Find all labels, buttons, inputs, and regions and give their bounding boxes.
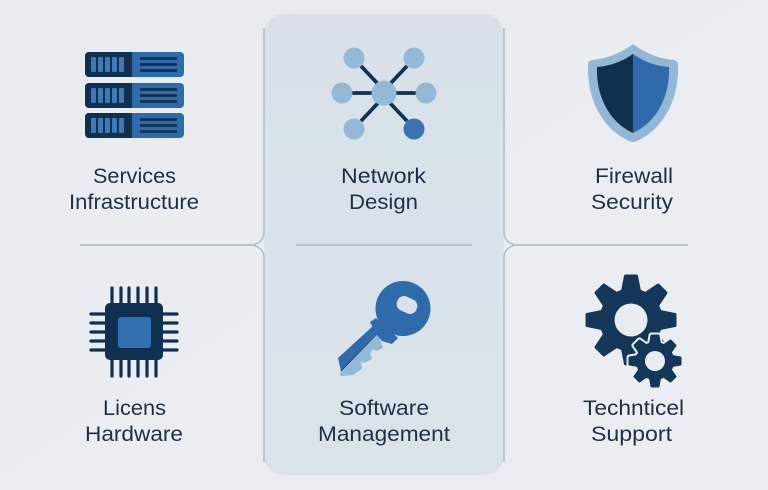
label: technical support: Technticel [583,397,684,420]
label: technical support [583,397,684,446]
panel: services infrastructure [69,52,199,214]
label: licens hardware: Hardware [85,423,183,446]
label: licens hardware: Licens [103,397,166,420]
label: software management: Management [318,423,450,446]
icon: server stack [85,52,184,138]
label: licens hardware [85,397,183,446]
label: network design: Design [349,191,418,214]
label: services infrastructure [69,165,199,214]
label: firewall security: Firewall [595,165,673,188]
label: network design [341,165,427,214]
small gear [630,336,680,386]
label: software management [318,397,450,446]
label: software management: Software [339,397,429,420]
small gear halo [630,336,680,386]
label: firewall security [591,165,674,214]
panel: technical support [583,276,684,446]
icon: shield [588,44,678,142]
panel: firewall security [588,44,678,214]
large gear [587,276,675,364]
label: services infrastructure: Services [93,165,176,188]
icon: key [338,281,430,376]
label: technical support: Support [591,423,672,446]
icon: microchip [91,288,177,376]
panel: software management [318,281,450,446]
panel: licens hardware [85,288,183,446]
label: services infrastructure: Infrastructure [69,191,199,214]
icon: gears [587,276,680,386]
panel: centre column highlight [264,14,504,475]
grid dividers [80,28,688,462]
label: firewall security: Security [591,191,674,214]
icon: network nodes [332,48,436,140]
label: network design: Network [341,165,427,188]
panel: network design [332,48,436,214]
